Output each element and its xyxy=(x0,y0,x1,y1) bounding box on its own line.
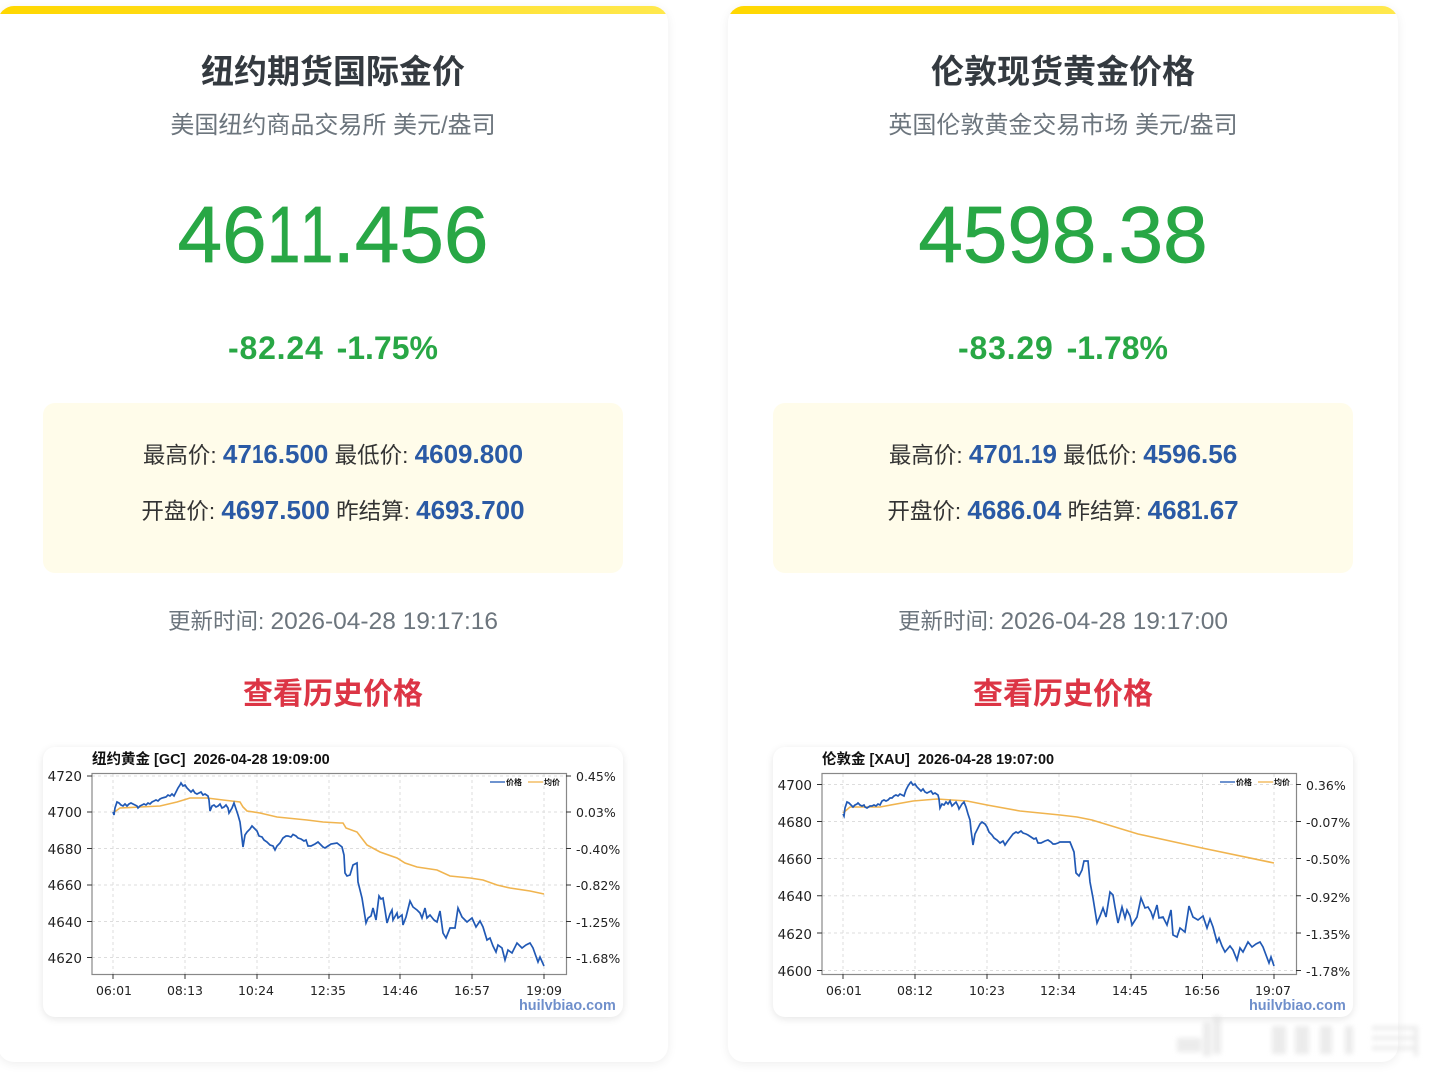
open and settle: 1 xyxy=(1191,495,1203,525)
legend: 均价 xyxy=(1274,777,1290,788)
left axis labels: 4660 xyxy=(48,878,82,894)
left axis labels: 4700 xyxy=(48,805,82,821)
right axis labels: -0.07% xyxy=(1306,815,1350,830)
heading: 纽约期货国际金价 xyxy=(201,53,465,90)
price: 1 xyxy=(300,190,333,279)
high and low: 最高价: 47 6.500 最低价: 4609.800 xyxy=(143,439,523,469)
price: 4598.38 xyxy=(918,190,1208,279)
update time: 更新时间: 2026-04-28 19:17:00 xyxy=(898,608,1228,635)
subtitle: 英国伦敦黄金交易市场 美元/盎司 xyxy=(888,112,1238,139)
left axis labels: 4640 xyxy=(778,889,812,905)
right axis labels: -1.25% xyxy=(576,915,620,930)
right axis labels xyxy=(576,769,620,966)
time axis labels: 12:35 xyxy=(310,983,346,998)
price: 46 .456 xyxy=(178,190,488,279)
time axis labels: 06:01 xyxy=(826,983,862,998)
time axis labels: 14:46 xyxy=(382,983,418,998)
left axis labels xyxy=(48,769,82,967)
time axis labels: 14:45 xyxy=(1112,983,1148,998)
left axis labels xyxy=(778,778,812,980)
chart card: New York xyxy=(43,747,623,1017)
time axis labels: 06:01 xyxy=(96,983,132,998)
time axis labels: 16:56 xyxy=(1184,983,1220,998)
time axis labels xyxy=(96,983,562,998)
right axis labels: -0.82% xyxy=(576,878,620,893)
legend: 均价 xyxy=(544,777,560,788)
high and low: 1 xyxy=(1031,439,1043,469)
legend: 价格 xyxy=(1236,777,1252,788)
legend xyxy=(1220,777,1290,788)
time axis labels: 10:24 xyxy=(238,983,274,998)
left axis labels: 4600 xyxy=(778,964,812,980)
panel: New York gold futures xyxy=(0,6,668,1062)
right axis labels: 0.36% xyxy=(1306,778,1346,793)
stats box xyxy=(773,403,1353,573)
high and low: 1 xyxy=(1012,439,1024,469)
average line xyxy=(113,798,544,894)
change: -83.29 -1.78% xyxy=(958,330,1168,366)
watermark: huilvbiao.com xyxy=(519,998,616,1014)
right axis labels: -0.40% xyxy=(576,842,620,857)
heading: 伦敦现货黄金价格 xyxy=(931,53,1195,90)
left axis labels: 4640 xyxy=(48,915,82,931)
left axis labels: 4660 xyxy=(778,852,812,868)
history link: 查看历史价格 xyxy=(243,678,423,711)
panel: London spot gold xyxy=(728,6,1398,1062)
right axis labels: -1.35% xyxy=(1306,927,1350,942)
chart title: 纽约黄金 [GC] 2026-04-28 19:09:00 xyxy=(92,750,330,768)
time axis labels: 08:12 xyxy=(897,983,933,998)
chart: New York gold xyxy=(48,750,620,1014)
open and settle: 开盘价: 4686.04 昨结算: 468 .67 xyxy=(887,495,1239,525)
open and settle: 开盘价: 4697.500 昨结算: 4693.700 xyxy=(141,495,525,525)
right axis labels: -0.50% xyxy=(1306,852,1350,867)
price line xyxy=(113,783,544,966)
watermark: huilvbiao.com xyxy=(1249,998,1346,1014)
time axis labels: 19:09 xyxy=(526,983,562,998)
right axis labels: 0.45% xyxy=(576,769,616,784)
left axis labels: 4720 xyxy=(48,769,82,785)
price line xyxy=(843,782,1274,966)
time axis labels: 19:07 xyxy=(1255,983,1291,998)
left axis labels: 4620 xyxy=(48,951,82,967)
right axis labels: -0.92% xyxy=(1306,890,1350,905)
time axis labels: 16:57 xyxy=(454,983,490,998)
price: 1 xyxy=(267,190,300,279)
time axis labels: 12:34 xyxy=(1040,983,1076,998)
right axis labels: -1.68% xyxy=(576,951,620,966)
time axis labels: 10:23 xyxy=(969,983,1005,998)
history link: 查看历史价格 xyxy=(973,678,1153,711)
right axis labels: 0.03% xyxy=(576,805,616,820)
average line xyxy=(843,799,1274,863)
left axis labels: 4680 xyxy=(778,815,812,831)
chart: London gold xyxy=(778,750,1350,1014)
time axis labels xyxy=(826,983,1291,998)
left axis labels: 4680 xyxy=(48,842,82,858)
update time: 更新时间: 2026-04-28 19:17:16 xyxy=(168,608,498,635)
high and low: 1 xyxy=(252,439,263,469)
legend: 价格 xyxy=(506,777,522,788)
chart title: 伦敦金 [XAU] 2026-04-28 19:07:00 xyxy=(822,750,1054,768)
right axis labels: -1.78% xyxy=(1306,964,1350,979)
legend xyxy=(490,777,560,788)
blurred corner mark xyxy=(1177,1016,1418,1056)
change: -82.24 -1.75% xyxy=(228,330,438,366)
left axis labels: 4620 xyxy=(778,927,812,943)
subtitle: 美国纽约商品交易所 美元/盎司 xyxy=(170,112,496,139)
stats box xyxy=(43,403,623,573)
chart card: London xyxy=(773,747,1353,1017)
time axis labels: 08:13 xyxy=(167,983,203,998)
right axis labels xyxy=(1306,778,1350,979)
left axis labels: 4700 xyxy=(778,778,812,794)
high and low: 最高价: 470 . 9 最低价: 4596.56 xyxy=(889,439,1237,469)
